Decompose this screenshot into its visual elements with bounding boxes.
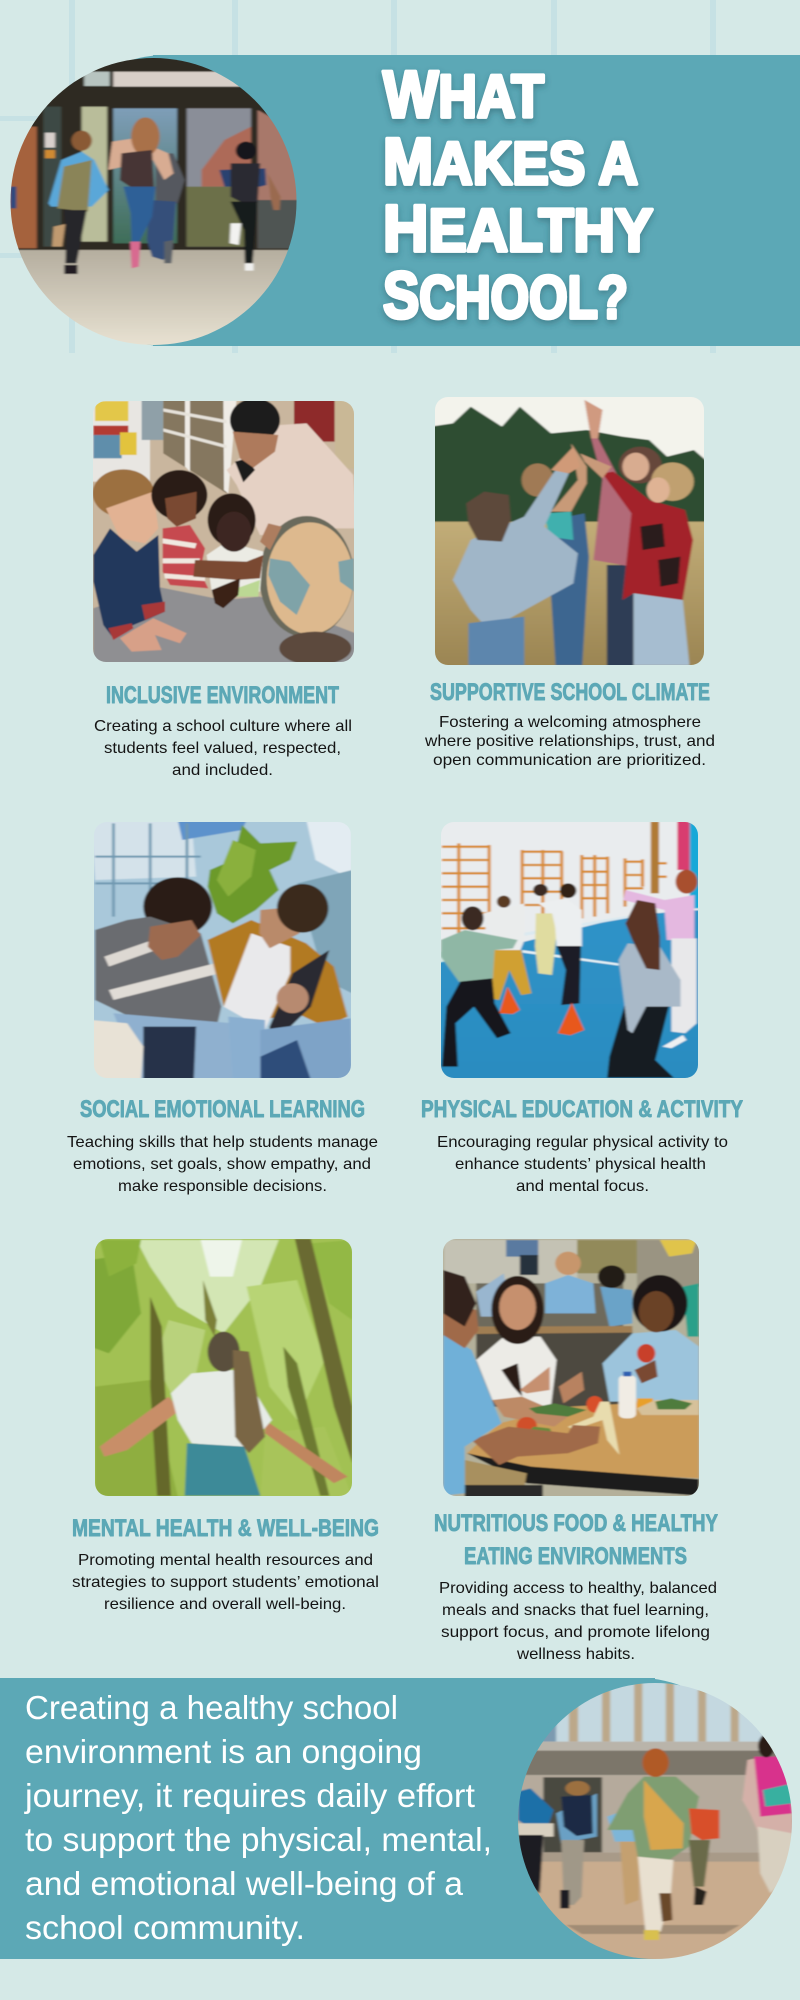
- photo: teacher and children with globe: [90, 395, 360, 665]
- panel: supportive school climate: [424, 393, 715, 769]
- title: SCHOOL?: [383, 258, 628, 332]
- photo: students running into school: [10, 58, 296, 345]
- photo: children in a gym with cones: [437, 818, 701, 1080]
- heading: SUPPORTIVE SCHOOL CLIMATE: [430, 679, 710, 706]
- description: Providing access to healthy, balanced: [439, 1580, 717, 1597]
- title: WHAT: [383, 57, 544, 131]
- description: wellness habits.: [516, 1646, 635, 1663]
- panel: nutritious food and healthy eating environments: [434, 1237, 718, 1663]
- heading: EATING ENVIRONMENTS: [464, 1543, 687, 1570]
- closing statement: school community.: [25, 1909, 305, 1946]
- description: and mental focus.: [516, 1178, 649, 1195]
- description: [439, 1580, 717, 1663]
- closing statement: to support the physical, mental,: [25, 1821, 492, 1858]
- title: HEALTHY: [383, 191, 653, 265]
- panel: physical education and activity: [421, 818, 743, 1195]
- description: resilience and overall well-being.: [104, 1596, 346, 1613]
- description: Encouraging regular physical activity to: [437, 1134, 728, 1151]
- description: meals and snacks that fuel learning,: [442, 1602, 709, 1619]
- background grid: [0, 0, 716, 353]
- description: Promoting mental health resources and: [78, 1552, 373, 1569]
- panel: social emotional learning: [67, 818, 378, 1195]
- description: where positive relationships, trust, and: [424, 733, 715, 750]
- closing statement: Creating a healthy school: [25, 1689, 398, 1726]
- photo: children high-fiving in a field: [431, 393, 710, 670]
- header banner: [0, 50, 800, 353]
- banner band: [37, 55, 800, 346]
- photo: children walking to school: [518, 1683, 792, 1959]
- description: open communication are prioritized.: [433, 752, 706, 769]
- footer banner: [0, 1673, 800, 1965]
- footer band: [0, 1678, 765, 1959]
- title: MAKES A: [383, 124, 638, 198]
- heading: NUTRITIOUS FOOD & HEALTHY: [434, 1510, 718, 1537]
- closing statement: [24, 1689, 492, 1946]
- description: strategies to support students’ emotional: [72, 1574, 379, 1591]
- heading: MENTAL HEALTH & WELL-BEING: [72, 1515, 379, 1542]
- description: make responsible decisions.: [118, 1178, 327, 1195]
- description: enhance students’ physical health: [455, 1156, 706, 1173]
- closing statement: journey, it requires daily effort: [24, 1777, 475, 1814]
- photo: student comforting a friend: [91, 818, 355, 1082]
- description: [94, 718, 352, 779]
- description: Teaching skills that help students manage: [67, 1134, 378, 1151]
- description: [67, 1134, 378, 1195]
- closing statement: and emotional well-being of a: [25, 1865, 464, 1902]
- description: support focus, and promote lifelong: [441, 1624, 710, 1641]
- photo: girl with open arms in a forest: [91, 1237, 357, 1498]
- heading: INCLUSIVE ENVIRONMENT: [106, 682, 339, 709]
- description: [72, 1552, 379, 1613]
- description: [437, 1134, 728, 1195]
- closing statement: environment is an ongoing: [25, 1733, 422, 1770]
- panel: mental health and well-being: [72, 1237, 379, 1613]
- description: [424, 714, 715, 769]
- panel: inclusive environment: [90, 395, 360, 779]
- heading: SOCIAL EMOTIONAL LEARNING: [80, 1096, 365, 1123]
- photo: students eating in a cafeteria: [440, 1237, 704, 1498]
- heading: [434, 1510, 718, 1570]
- description: emotions, set goals, show empathy, and: [73, 1156, 371, 1173]
- description: and included.: [172, 762, 273, 779]
- description: Fostering a welcoming atmosphere: [439, 714, 701, 731]
- description: students feel valued, respected,: [104, 740, 341, 757]
- title: [383, 57, 653, 332]
- description: Creating a school culture where all: [94, 718, 352, 735]
